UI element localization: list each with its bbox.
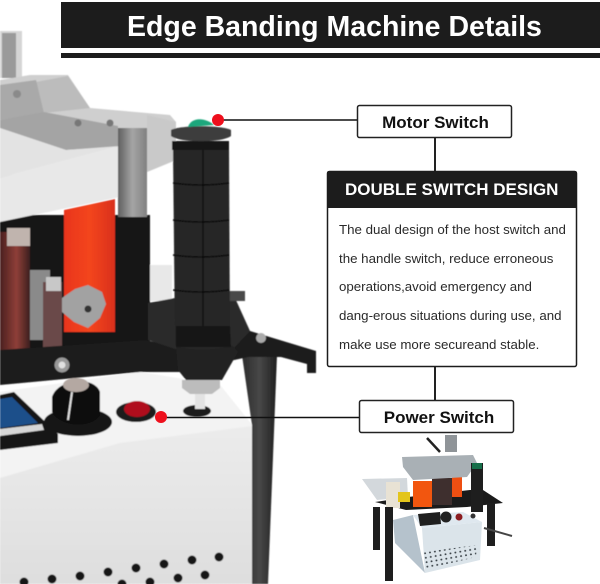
leg	[242, 355, 277, 584]
left extension table	[362, 478, 408, 500]
black column	[115, 217, 148, 336]
dark interior	[0, 215, 150, 350]
control knob	[44, 378, 112, 436]
cylinders and rollers	[432, 478, 452, 505]
black tabletop	[375, 490, 503, 510]
connector: power switch	[155, 411, 359, 423]
title banner	[61, 2, 600, 58]
vent holes	[20, 552, 224, 584]
rubber handle	[171, 119, 231, 350]
small full machine photo	[362, 435, 512, 581]
panel body text: the handle switch, reduce erroneous	[339, 251, 554, 266]
handle base bolt	[182, 380, 220, 417]
star knob	[62, 285, 106, 328]
connector: motor label to panel	[434, 138, 436, 171]
machine close-up photo	[0, 31, 316, 584]
panel body text: The dual design of the host switch and	[339, 222, 566, 237]
panel body text: operations,avoid emergency and	[339, 279, 532, 294]
left cylinder	[0, 232, 30, 350]
connector: motor switch	[212, 114, 357, 126]
label: Power Switch: Power Switch	[384, 408, 494, 427]
vents	[424, 545, 477, 569]
red power rocker	[116, 401, 156, 422]
handle	[471, 463, 483, 512]
panel body text: make use more secureand stable.	[339, 337, 539, 352]
handle collar	[176, 346, 238, 380]
cabinet	[393, 515, 425, 573]
plate front face	[0, 128, 120, 178]
silver shaft	[0, 31, 22, 78]
cable	[484, 528, 512, 536]
post and bolt	[30, 270, 50, 340]
title text: Edge Banding Machine Details	[127, 11, 542, 43]
legs	[373, 503, 495, 550]
panel body text: dang-erous situations during use, and	[339, 308, 562, 323]
top housing	[0, 75, 176, 180]
controls	[418, 512, 441, 526]
orange cylinder	[64, 199, 115, 332]
label: Motor Switch: Motor Switch	[382, 113, 489, 132]
white cabinet	[0, 372, 253, 584]
panel: double switch design	[327, 171, 577, 366]
panel header: DOUBLE SWITCH DESIGN	[345, 180, 558, 199]
label: Power Switch	[360, 400, 514, 432]
label: Motor Switch	[358, 106, 512, 138]
black table plate	[0, 330, 316, 385]
background light panel behind table	[148, 265, 172, 301]
grey plate behind handle	[148, 298, 250, 350]
mast and arm	[445, 435, 457, 452]
display panel	[0, 392, 58, 450]
panel header	[327, 171, 577, 208]
connector: panel to power label	[434, 367, 436, 400]
grey housing	[402, 455, 477, 480]
grey column	[118, 128, 147, 217]
panel body text	[339, 222, 566, 352]
